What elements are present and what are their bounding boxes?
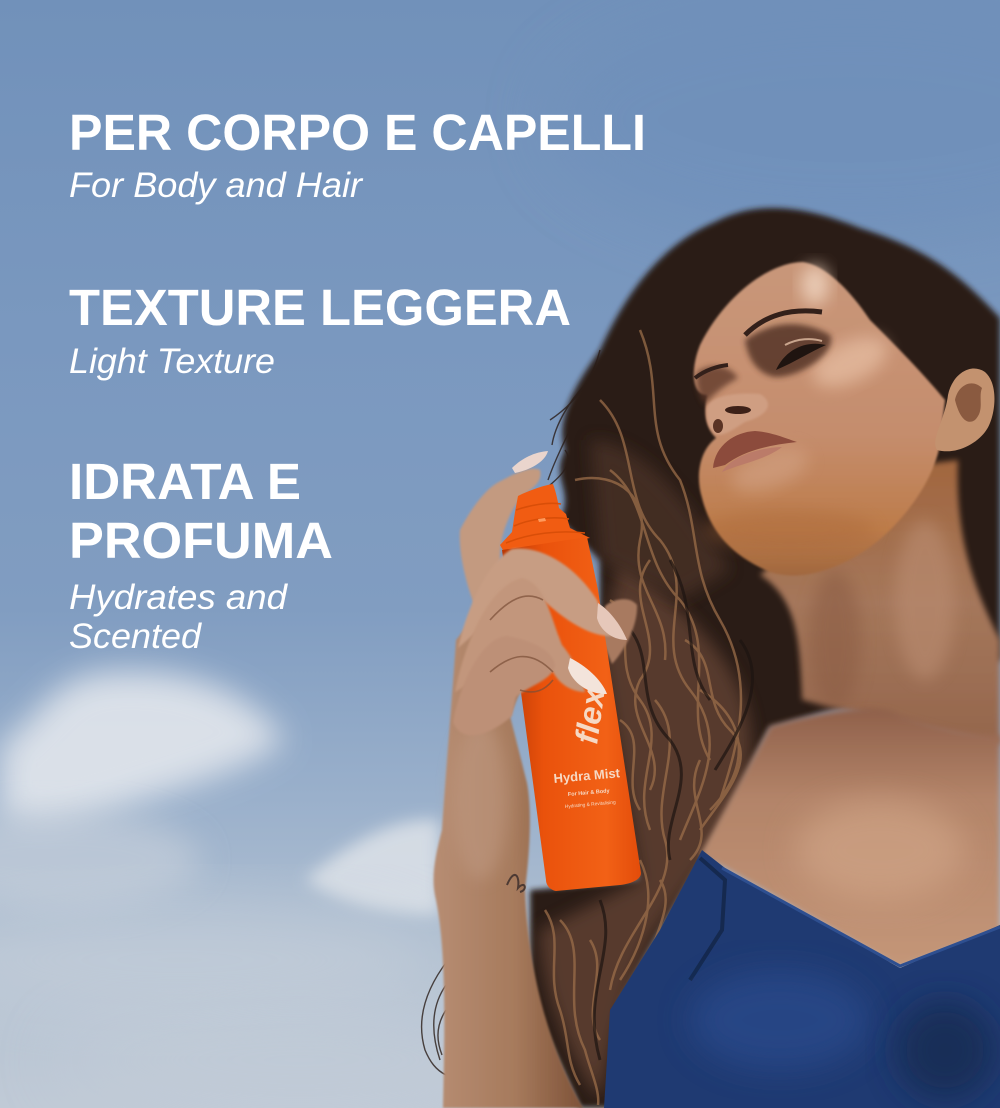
index finger — [458, 548, 612, 648]
fingertip behind bottle — [602, 599, 637, 664]
face — [694, 262, 945, 576]
chest highlight — [795, 800, 965, 900]
hair — [422, 208, 1000, 1108]
bottle body — [502, 537, 641, 891]
heading: light texture: Light Texture — [69, 342, 275, 381]
ring finger — [453, 636, 555, 735]
dress — [604, 850, 1000, 1108]
bottle claims: Hydrating & Revitalising — [565, 800, 616, 810]
wrist tattoo — [507, 875, 525, 892]
thumbnail — [512, 451, 548, 473]
heading: body and hair: For Body and Hair — [69, 166, 363, 205]
hair strands: dark — [594, 560, 753, 1060]
heading: hydrates and scented — [69, 453, 333, 656]
fingers — [453, 548, 627, 735]
nose — [707, 394, 768, 435]
forearm and back of hand — [434, 610, 583, 1108]
heading: light texture: TEXTURE LEGGERA — [69, 279, 571, 336]
clouds — [0, 671, 540, 1108]
nail: index — [597, 603, 627, 640]
bottle name: Hydra Mist — [553, 765, 621, 786]
product bottle — [500, 484, 641, 891]
hair wisps over sky — [422, 350, 600, 1075]
bottle tagline: For Hair & Body — [568, 788, 611, 798]
heading: hydrates and scented: PROFUMA — [69, 512, 333, 569]
middle finger — [455, 578, 585, 692]
heading: body and hair — [69, 104, 646, 205]
bottle cap — [500, 484, 590, 552]
bottle logo: flex — [568, 685, 612, 746]
hair strands: light — [545, 330, 741, 1105]
neck — [760, 460, 1000, 745]
nail: middle — [568, 658, 607, 694]
lips — [713, 431, 797, 472]
heading: hydrates and scented: Scented — [69, 617, 203, 656]
chest — [700, 708, 1000, 968]
finger creases — [490, 596, 553, 692]
heading: hydrates and scented: IDRATA E — [69, 453, 301, 510]
thumb — [460, 469, 541, 612]
heading: body and hair: PER CORPO E CAPELLI — [69, 104, 646, 161]
heading: light texture — [69, 279, 571, 381]
heading: hydrates and scented: Hydrates and — [69, 578, 289, 617]
eye and brow — [695, 311, 831, 405]
ear — [935, 369, 994, 451]
